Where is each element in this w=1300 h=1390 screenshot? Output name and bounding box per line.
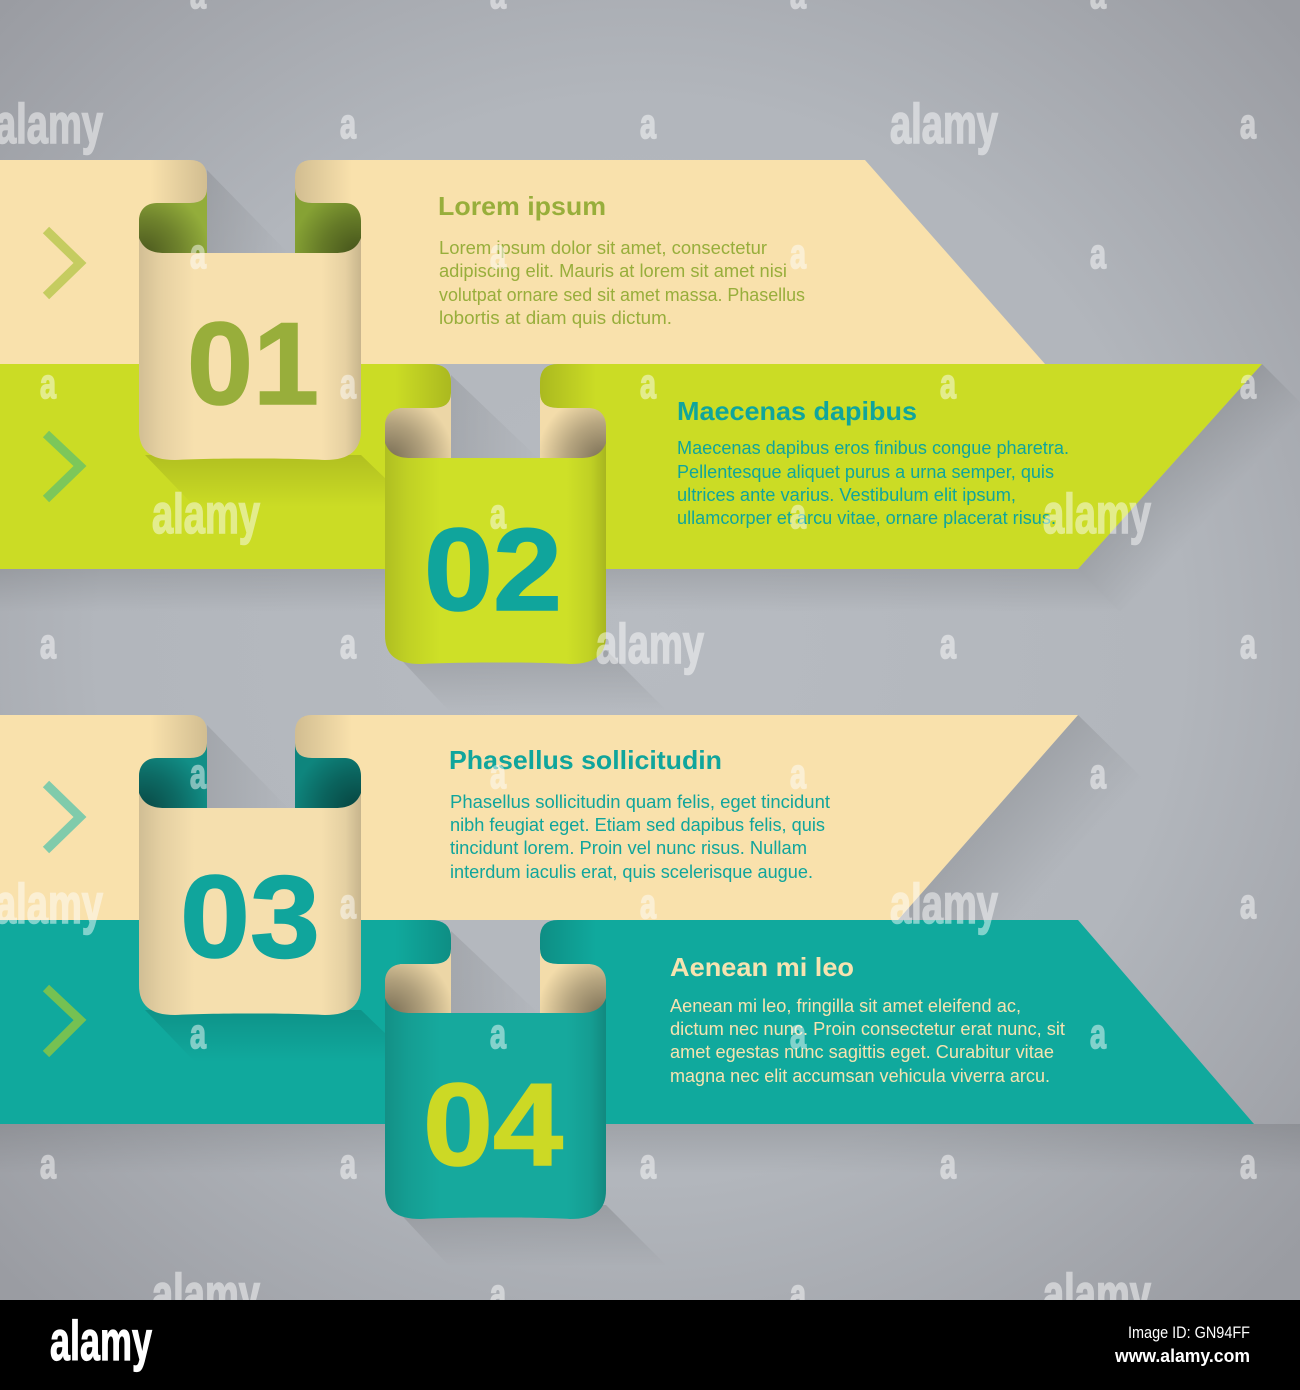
watermarks: a: [1090, 1010, 1106, 1057]
panel: ribbon 4: [0, 920, 1254, 1124]
watermarks: a: [340, 360, 356, 407]
watermarks: a: [790, 1010, 806, 1057]
text block 4: amet egestas nunc sagittis eget. Curabitur vitae: [670, 1042, 1054, 1062]
tag 4 with number: [385, 949, 606, 1219]
watermarks: alamy: [1043, 482, 1151, 545]
watermarks: a: [790, 230, 806, 277]
watermarks: a: [40, 620, 56, 667]
watermarks: a: [1240, 880, 1256, 927]
watermarks: a: [490, 1010, 506, 1057]
watermarks: a: [640, 1140, 656, 1187]
text block 3: Phasellus sollicitudin: [449, 745, 722, 775]
watermarks: a: [1090, 230, 1106, 277]
watermarks: a: [40, 1140, 56, 1187]
watermarks: a: [490, 230, 506, 277]
number 03: 03: [180, 851, 320, 982]
text block 1: adipiscing elit. Mauris at lorem sit amet nisi: [439, 261, 787, 281]
watermarks: alamy: [152, 1262, 260, 1325]
watermarks: a: [790, 1270, 806, 1317]
tag 3 with number: [139, 743, 361, 1015]
watermarks: a: [190, 750, 206, 797]
watermarks: a: [1240, 360, 1256, 407]
text block 4: magna nec elit accumsan vehicula viverra arcu.: [670, 1066, 1050, 1086]
watermarks: a: [190, 1010, 206, 1057]
watermarks: alamy: [890, 92, 998, 155]
watermarks: a: [940, 360, 956, 407]
watermarks: a: [790, 490, 806, 537]
text block 3: [449, 745, 830, 882]
footer image id: Image ID: GN94FF: [1128, 1323, 1250, 1342]
number 01: 01: [187, 298, 319, 429]
text block 1: volutpat ornare sed sit amet massa. Phasellus: [439, 285, 805, 305]
text block 2: Maecenas dapibus: [677, 396, 917, 426]
panel: ribbon 1: [0, 160, 1045, 364]
watermarks: a: [1090, 750, 1106, 797]
text block 2: Maecenas dapibus eros finibus congue pharetra.: [677, 438, 1069, 458]
watermarks: a: [940, 620, 956, 667]
watermarks: a: [640, 100, 656, 147]
watermarks: alamy: [152, 482, 260, 545]
watermarks: a: [1240, 100, 1256, 147]
watermarks: a: [490, 1270, 506, 1317]
watermarks: a: [1240, 620, 1256, 667]
footer bar: [0, 1300, 1300, 1390]
tag 2 with number: [385, 393, 606, 664]
text block 4: [670, 952, 1065, 1086]
watermarks: alamy: [1043, 1262, 1151, 1325]
text block 1: lobortis at diam quis dictum.: [439, 308, 672, 328]
text block 3: tincidunt lorem. Proin vel nunc risus. Nullam: [450, 838, 807, 858]
long shadows on background: [0, 170, 1300, 1267]
watermarks: a: [940, 1140, 956, 1187]
watermarks: a: [340, 100, 356, 147]
number 04: 04: [423, 1059, 563, 1190]
number 02: 02: [424, 504, 562, 635]
panel: ribbon 2: [0, 364, 1262, 569]
text block 1: Lorem ipsum dolor sit amet, consectetur: [439, 238, 767, 258]
watermarks: alamy: [890, 872, 998, 935]
panel: ribbon 3: [0, 715, 1078, 920]
watermarks: a: [1240, 1140, 1256, 1187]
text block 3: nibh feugiat eget. Etiam sed dapibus felis, quis: [450, 815, 825, 835]
watermarks: a: [490, 490, 506, 537]
text block 4: Aenean mi leo, fringilla sit amet eleifend ac,: [670, 996, 1021, 1016]
text block 2: [677, 396, 1069, 528]
text block 2: ultrices ante varius. Vestibulum elit ipsum,: [677, 485, 1016, 505]
text block 4: dictum nec nunc. Proin consectetur erat nunc, sit: [670, 1019, 1065, 1039]
watermarks: a: [790, 750, 806, 797]
text block 1: Lorem ipsum: [438, 191, 606, 221]
text block 3: interdum iaculis erat, quis scelerisque augue.: [450, 862, 813, 882]
text block 2: ullamcorper et arcu vitae, ornare placerat risus.: [677, 508, 1056, 528]
watermarks: a: [340, 1140, 356, 1187]
text block 4: Aenean mi leo: [670, 952, 854, 982]
icon: chevron 3: [46, 784, 80, 850]
text block 3: Phasellus sollicitudin quam felis, eget tincidunt: [450, 792, 830, 812]
watermarks: alamy: [596, 612, 704, 675]
tag 1 with number: [139, 188, 361, 460]
text block 1: [438, 191, 805, 328]
watermarks: a: [490, 750, 506, 797]
watermarks: a: [190, 230, 206, 277]
watermarks: a: [340, 620, 356, 667]
watermarks: a: [640, 360, 656, 407]
icon: chevron 1: [46, 230, 80, 296]
footer website: www.alamy.com: [1114, 1346, 1250, 1366]
icon: chevron 4: [46, 988, 80, 1054]
watermarks: a: [640, 880, 656, 927]
footer logo: alamy: [50, 1309, 152, 1372]
text block 2: Pellentesque aliquet purus a urna semper, quis: [677, 462, 1054, 482]
watermarks: a: [40, 360, 56, 407]
icon: chevron 2: [46, 434, 80, 499]
watermarks: a: [340, 880, 356, 927]
